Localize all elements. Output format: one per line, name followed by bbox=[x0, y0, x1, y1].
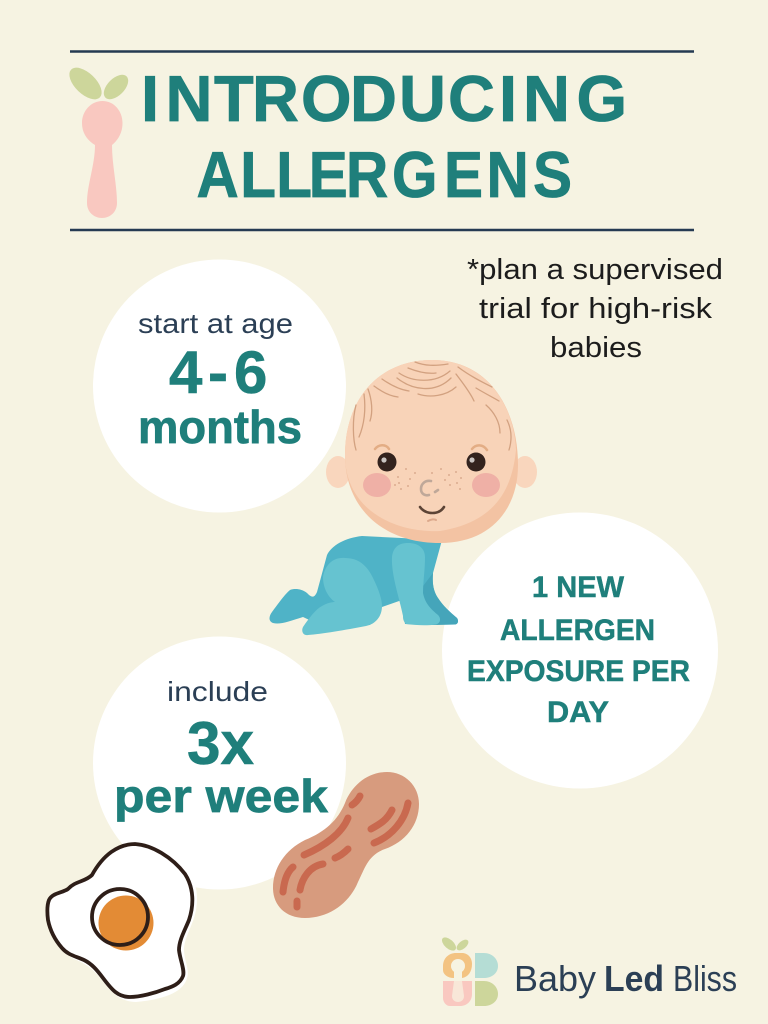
title: INTRODUCING bbox=[141, 62, 627, 135]
note: supervised trial: babies bbox=[550, 332, 642, 364]
panel: 1 new allergen exposure per day: ALLERGEN bbox=[500, 614, 655, 647]
title: ALLERGENS bbox=[196, 139, 572, 212]
title bbox=[141, 62, 627, 212]
note: supervised trial: trial for high-risk bbox=[479, 293, 713, 325]
logo: Baby Led Bliss bbox=[440, 935, 737, 1006]
icon: peanut bbox=[273, 772, 419, 918]
baby body bbox=[270, 536, 458, 635]
logo wordmark bbox=[514, 958, 737, 999]
baby face bbox=[363, 445, 500, 521]
icon: fried egg bbox=[47, 844, 197, 1002]
illustration: crawling baby bbox=[270, 360, 537, 635]
panel: start at age: 4-6 bbox=[169, 339, 267, 406]
panel: start at age bbox=[93, 260, 346, 512]
logo wordmark: Led bbox=[604, 958, 664, 999]
panel: 1 new allergen exposure per day: 1 NEW bbox=[532, 571, 625, 604]
logo mark bbox=[440, 935, 498, 1006]
panel: include 3x per week: 3x bbox=[187, 710, 254, 777]
panel: 1 new allergen exposure per day bbox=[442, 512, 718, 788]
baby head bbox=[345, 360, 518, 543]
panel: include 3x per week: per week bbox=[114, 770, 328, 822]
logo wordmark: Baby bbox=[514, 958, 596, 999]
panel: 1 new allergen exposure per day: DAY bbox=[547, 696, 609, 729]
note: supervised trial bbox=[467, 254, 723, 364]
logo wordmark: Bliss bbox=[673, 958, 737, 999]
note: supervised trial: *plan a supervised bbox=[467, 254, 723, 286]
panel: 1 new allergen exposure per day: EXPOSURE PER bbox=[467, 655, 690, 688]
panel: include 3x per week bbox=[93, 636, 346, 890]
panel: start at age: months bbox=[138, 401, 302, 453]
panel: start at age: start at age bbox=[138, 308, 293, 339]
panel: include 3x per week: include bbox=[167, 676, 268, 707]
baby ears bbox=[326, 456, 537, 488]
baby hair bbox=[353, 362, 511, 450]
icon: spoon with leaves bbox=[64, 62, 133, 218]
